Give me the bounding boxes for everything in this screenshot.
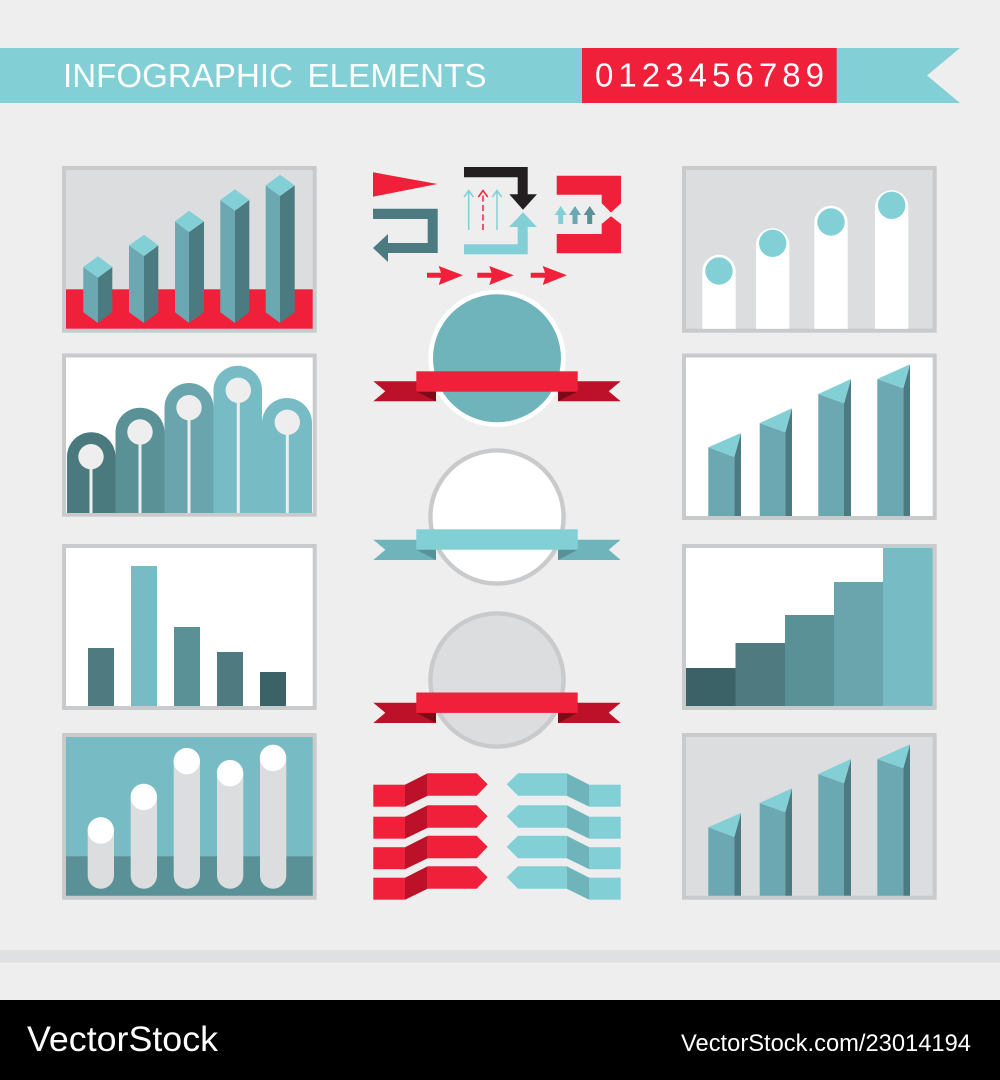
bar 5 [260,672,286,706]
icon: red bracket top [557,176,621,212]
step 5 [883,548,933,706]
label 4 [507,866,621,900]
angled bar 4 [877,364,910,516]
cylinder 4 [217,760,243,889]
brand name: VectorStock [27,1020,219,1059]
isometric bar 5 [266,175,295,323]
panel: lollipop pills [684,168,935,331]
icon: red pennant [373,172,438,197]
step 4 [834,582,883,706]
pill 1 [702,255,736,329]
angled bar 3 [818,759,851,896]
icon group: arrows [373,167,621,285]
badge: white circle with cyan ribbon [373,450,621,584]
hill 3 [164,383,214,513]
bar 2 [131,566,157,706]
header banner [0,48,960,103]
angled bar 4 [877,744,910,896]
hill 1 [67,432,116,513]
label 4 [373,866,488,900]
pill 4 [875,190,908,329]
icon: red arrow 2 [477,266,514,285]
bar 1 [88,648,114,706]
panel: cylinder chart [64,735,315,898]
number box [582,48,837,103]
icon: thin cyan arrow left [464,190,473,230]
panel: flat bar chart [64,546,315,708]
icon: red arrow 3 [531,266,567,285]
isometric bar 2 [129,235,158,323]
ribbon [373,371,621,401]
ribbon [373,529,621,560]
icon: thin red dashed arrow [482,191,484,230]
bar 4 [217,652,243,706]
icon: small arrow teal [569,206,581,224]
icon: red arrow 1 [427,266,463,285]
angled bar 1 [708,433,741,516]
title: INFOGRAPHIC [63,57,293,94]
red folded arrow labels [373,773,488,900]
angled bar 2 [760,788,792,896]
label 3 [507,836,621,869]
label 1 [507,773,621,807]
label 3 [373,836,488,869]
icon: small arrow cyan [555,206,567,224]
cylinder 2 [131,784,157,889]
panel: angled bars on white [684,356,935,518]
step 2 [736,643,785,706]
title [63,57,486,94]
label 2 [373,805,488,839]
hill 4 [214,366,262,513]
angled bar 3 [818,379,851,516]
cyan folded arrow labels [507,773,621,900]
panel: angled bars on grey [684,735,935,898]
isometric bar 3 [175,211,204,323]
badge: grey circle with red ribbon [373,613,621,747]
ribbon [373,692,621,723]
cylinder 1 [88,817,114,889]
cylinder 5 [260,745,286,889]
icon: red bracket bottom [557,216,621,253]
icon: thin cyan arrow right [492,190,502,230]
cylinder 3 [174,748,200,889]
icon: small arrow dark teal [584,206,596,224]
bar 3 [174,627,200,706]
digits: 0123456789 [595,56,824,94]
image id: VectorStock.com/23014194 [681,1030,971,1057]
pill 2 [756,228,789,329]
isometric bar 4 [220,189,249,323]
icon: cyan up arrow [464,212,537,254]
banner ribbon [0,48,960,103]
step 3 [785,615,834,706]
watermark footer [0,1000,1000,1080]
icon: thin red arrow head [478,190,488,197]
panel: arched hills chart [64,356,315,515]
title: ELEMENTS [308,57,486,94]
isometric bar 1 [83,256,112,323]
angled bar 2 [760,408,792,516]
hill 2 [116,408,164,513]
icon: teal return arrow [373,209,438,262]
pill 3 [814,206,848,329]
panel: isometric bars on red [64,168,315,331]
label 2 [507,805,621,839]
step 1 [686,668,736,706]
badge: teal circle with red ribbon [373,290,621,427]
hill 5 [262,398,312,513]
panel: staircase chart [684,546,935,708]
angled bar 1 [708,813,741,896]
label 1 [373,773,488,807]
icon: black down arrow [464,167,537,210]
